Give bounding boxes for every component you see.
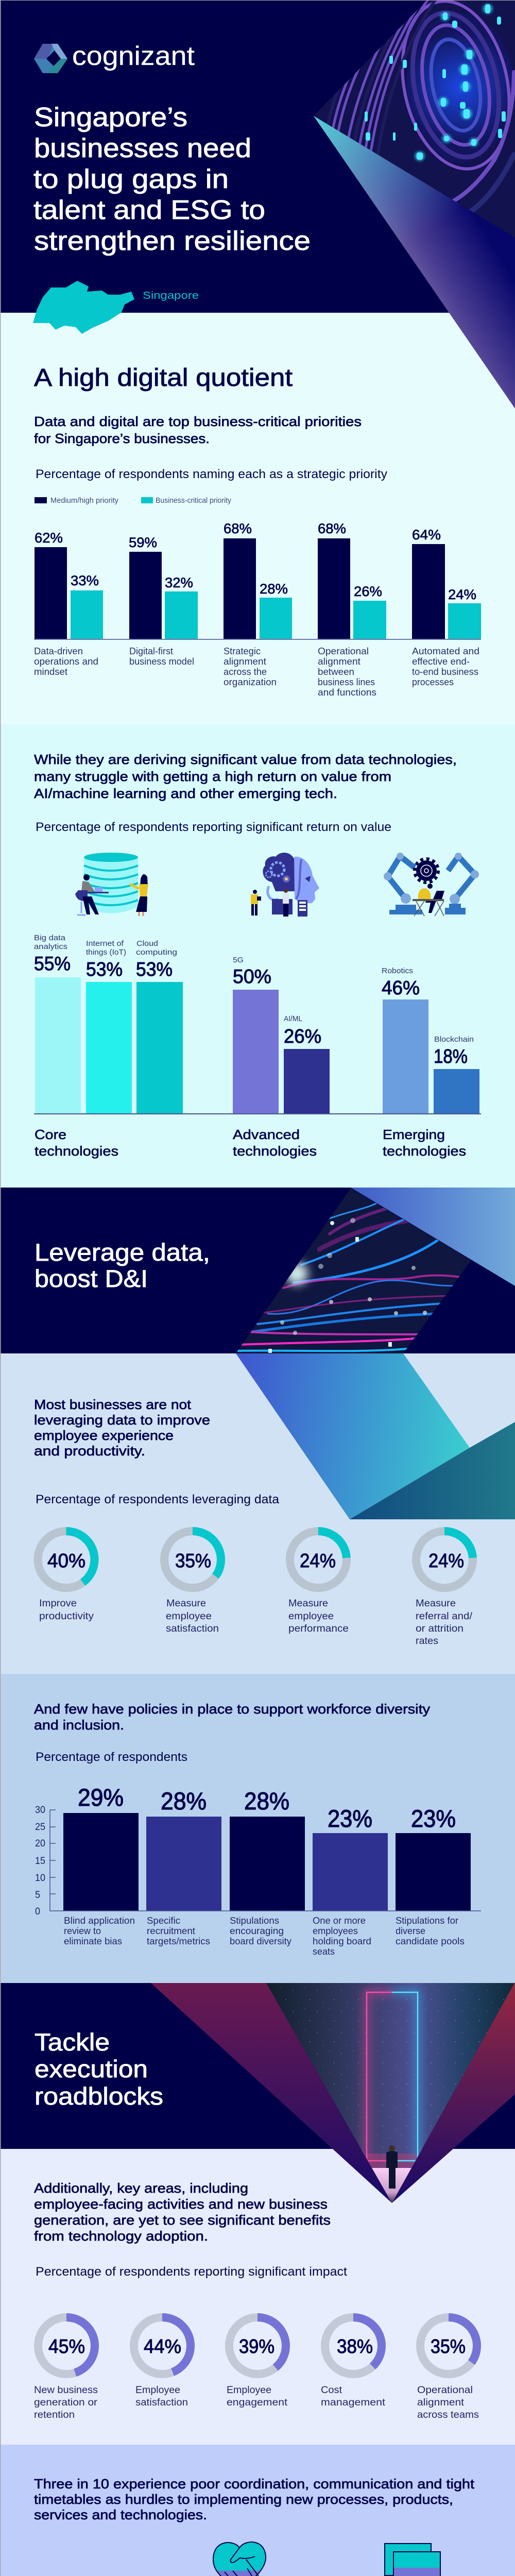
statement: not leveraging data: employee experience (34, 1428, 174, 1443)
statement: not leveraging data: and productivity. (34, 1443, 145, 1459)
bar chart: technology return on value: Emerging (383, 1127, 445, 1142)
panel: leveraging data (0, 1353, 515, 1674)
heading: leverage data, boost D&I: Leverage data, (35, 1239, 210, 1266)
donut: referral and attrition 24%: referral and/ (416, 1611, 473, 1622)
bar chart: strategic priorities: mindset (34, 667, 67, 677)
bar chart: D&I policies: seats (313, 1946, 335, 1957)
donut: new business 45%: 45% (48, 2336, 85, 2358)
bar chart: strategic priorities: 64% (412, 527, 441, 543)
donut: employee engagement 39%: engagement (227, 2397, 288, 2408)
donut: cost management 38%: 38% (337, 2336, 373, 2358)
title: strengthen resilience (34, 226, 311, 256)
logo: cognizant (34, 41, 195, 73)
bar chart: D&I policies: review to (64, 1926, 101, 1936)
shard: blue gradient band (236, 1353, 470, 1519)
donut: referral and attrition 24%: or attrition (416, 1623, 464, 1634)
bar chart: technology return on value: Advanced (233, 1127, 300, 1142)
statement: three in 10: services and technologies. (34, 2507, 207, 2522)
bar chart: technology return on value: Robotics (382, 967, 413, 975)
bar chart: D&I policies: 29% (78, 1784, 124, 1811)
bar chart: strategic priorities: processes (412, 677, 454, 687)
bar chart: D&I policies: holding board (313, 1936, 371, 1946)
bar chart: technology return on value: things (IoT) (86, 948, 126, 957)
shard: blue triangle (351, 1188, 515, 1286)
statement: deriving significant value: many struggle with getting a high return on value from (34, 769, 391, 784)
statement: three in 10: timetables as hurdles to implementing new processes, products, (34, 2492, 453, 2507)
icon: speech bubbles (385, 2544, 440, 2576)
bar chart: technology return on value: technologies (35, 1143, 118, 1159)
legend (35, 497, 232, 505)
donut: operational alignment 35%: alignment (417, 2397, 465, 2408)
bar chart: technology return on value (34, 934, 481, 1159)
statement: yet to see benefits: generation, are yet to see significant benefits (34, 2212, 331, 2228)
legend: Medium/high priority (50, 497, 119, 505)
bar chart: technology return on value: 5G (233, 956, 244, 964)
chart caption: Percentage of respondents reporting significant impact (36, 2265, 347, 2279)
statement: data and digital priorities: for Singapore’s businesses. (34, 431, 210, 446)
donut: new business 45%: New business (34, 2385, 98, 2396)
banner image: neon doorway (263, 1983, 515, 2205)
chart caption: Percentage of respondents (36, 1750, 187, 1764)
donut: improve productivity 40% (38, 1531, 95, 1622)
bar chart: technology return on value: 53% (86, 959, 123, 980)
bar chart: strategic priorities: 59% (129, 535, 157, 550)
donut: employee performance 24%: employee (288, 1611, 334, 1622)
bar chart: D&I policies: 0 (35, 1906, 40, 1917)
bar chart: strategic priorities: and functions (318, 687, 376, 698)
donut: improve productivity 40%: 40% (47, 1550, 85, 1572)
donut: employee engagement 39% (227, 2317, 288, 2408)
donut: employee performance 24%: performance (288, 1623, 349, 1634)
donut: operational alignment 35%: 35% (431, 2336, 466, 2358)
donut: operational alignment 35%: Operational (417, 2385, 473, 2396)
statement: not leveraging data: Most businesses are not (34, 1397, 192, 1412)
statement: not leveraging data: leveraging data to improve (34, 1412, 210, 1428)
donut: operational alignment 35% (417, 2317, 479, 2420)
bar chart: D&I policies: diverse (396, 1926, 425, 1936)
bar chart: strategic priorities: Operational (318, 646, 369, 656)
bar chart: strategic priorities: 26% (354, 584, 382, 599)
bar chart: D&I policies: 23% (328, 1805, 372, 1832)
bar chart: strategic priorities: 68% (224, 521, 252, 536)
bar chart: technology return on value: 46% (382, 977, 420, 999)
bar chart: D&I policies: employees (313, 1926, 358, 1936)
bar chart: technology return on value: 50% (233, 966, 271, 988)
heading: tackle execution roadblocks (35, 2028, 163, 2110)
donut: employee satisfaction 44%: Employee (135, 2385, 180, 2396)
heading: tackle execution roadblocks: roadblocks (35, 2082, 163, 2110)
hero image: swirling light strands (309, 0, 515, 242)
bar chart: D&I policies: 15 (35, 1856, 45, 1867)
donut: employee satisfaction 44%: 44% (144, 2336, 181, 2358)
bar chart: strategic priorities: across the (224, 667, 267, 677)
statement: few have policies: and inclusion. (34, 1717, 124, 1733)
map: Singapore (33, 281, 134, 334)
bar chart: strategic priorities: 28% (260, 581, 288, 597)
logo: cognizant: cognizant (72, 41, 195, 71)
shard: left maroon (151, 1983, 392, 2203)
label: Singapore: Singapore (143, 290, 199, 301)
statement: deriving significant value (34, 752, 457, 801)
donut: new business 45% (34, 2317, 98, 2420)
donut: improve productivity 40%: productivity (39, 1611, 94, 1622)
donut: employee satisfaction 35%: 35% (175, 1550, 211, 1572)
bar chart: D&I policies: Specific (147, 1916, 180, 1926)
donut: new business 45%: retention (34, 2410, 75, 2420)
heading: leverage data, boost D&I (35, 1239, 210, 1292)
heading: tackle execution roadblocks: execution (35, 2055, 148, 2082)
statement: three in 10: Three in 10 experience poor coordination, communication and tight (34, 2476, 475, 2492)
bar chart: technology return on value: Big data (34, 934, 66, 942)
bar chart: technology return on value: Internet of (86, 939, 124, 948)
bar chart: strategic priorities: alignment (318, 656, 360, 667)
bar chart: strategic priorities: between (318, 667, 354, 677)
donut: cost management 38% (321, 2317, 386, 2408)
shard: right maroon (392, 1983, 515, 2203)
chart caption: Percentage of respondents leveraging data (36, 1493, 280, 1506)
donut: referral and attrition 24% (416, 1531, 473, 1647)
bar chart: D&I policies (35, 1784, 481, 1957)
statement: data and digital priorities: Data and digital are top business-critical priorities (34, 414, 362, 429)
illustration: robot arms (384, 853, 479, 916)
bar chart: D&I policies: 28% (161, 1787, 207, 1815)
bar chart: technology return on value: Blockchain (434, 1035, 474, 1044)
donut: employee satisfaction 35%: satisfaction (166, 1623, 219, 1634)
donut: referral and attrition 24%: rates (416, 1636, 438, 1647)
chart caption: Percentage of respondents reporting significant return on value (36, 820, 391, 834)
donut: employee engagement 39%: 39% (239, 2336, 274, 2358)
bar chart: D&I policies: encouraging (230, 1926, 284, 1936)
donut: employee performance 24% (288, 1531, 349, 1634)
panel: tackle execution roadblocks banner (0, 1983, 515, 2205)
statement: yet to see benefits: Additionally, key areas, including (34, 2180, 248, 2196)
bar chart: D&I policies: 23% (411, 1805, 456, 1832)
bar chart: D&I policies: targets/metrics (147, 1936, 210, 1946)
donut: employee satisfaction 35% (164, 1531, 221, 1634)
statement: data and digital priorities (34, 414, 362, 446)
donut: employee satisfaction 35%: employee (166, 1611, 212, 1622)
bar chart: D&I policies: recruitment (147, 1926, 195, 1936)
statement: three in 10 (34, 2476, 475, 2522)
panel: hero (0, 0, 515, 409)
bar chart: strategic priorities: operations and (34, 656, 98, 667)
bar chart: strategic priorities: business lines (318, 677, 375, 687)
donut: new business 45%: generation or (34, 2397, 98, 2408)
title: to plug gaps in (33, 164, 229, 194)
donut: referral and attrition 24%: 24% (428, 1550, 464, 1572)
bar chart: D&I policies: eliminate bias (64, 1936, 122, 1946)
illustration: database with people (75, 853, 148, 916)
bar chart: D&I policies: Blind application (64, 1916, 135, 1926)
bar chart: D&I policies: 10 (35, 1873, 45, 1884)
bar chart: D&I policies: One or more (313, 1916, 366, 1926)
bar chart: strategic priorities: 68% (318, 521, 346, 536)
bar chart: D&I policies: 25 (35, 1822, 45, 1833)
bar chart: strategic priorities (34, 521, 481, 698)
donut: employee satisfaction 44% (134, 2317, 191, 2408)
bar chart: D&I policies: candidate pools (396, 1936, 465, 1946)
bar chart: technology return on value: computing (136, 948, 177, 957)
icon: handshake heart (213, 2542, 266, 2576)
bar chart: strategic priorities: alignment (224, 656, 266, 667)
bar chart: technology return on value: 55% (34, 953, 71, 975)
title (33, 103, 311, 256)
bar chart: technology return on value: Core (35, 1127, 66, 1142)
donut: improve productivity 40%: Improve (39, 1598, 77, 1609)
bar chart: technology return on value: 53% (136, 959, 173, 980)
bar chart: strategic priorities: Data-driven (34, 646, 83, 656)
donut: operational alignment 35%: across teams (417, 2410, 479, 2420)
panel: leverage data, boost D&I banner (0, 1185, 515, 1353)
donut: cost management 38%: Cost (321, 2385, 342, 2396)
bar chart: D&I policies: 20 (35, 1838, 45, 1849)
bar chart: technology return on value: 18% (434, 1046, 468, 1067)
panel: return on value (0, 724, 515, 1188)
donut: employee engagement 39%: Employee (227, 2385, 271, 2396)
bar chart: D&I policies: Stipulations (230, 1916, 279, 1926)
bar chart: strategic priorities: to-end business (412, 667, 478, 677)
donut: employee satisfaction 44%: satisfaction (135, 2397, 188, 2408)
donut: cost management 38%: management (321, 2397, 386, 2408)
bar chart: technology return on value: 26% (284, 1026, 321, 1047)
bar chart: strategic priorities: effective end- (412, 656, 470, 667)
bar chart: D&I policies: 30 (35, 1805, 45, 1816)
illustration: AI head (251, 853, 319, 917)
statement: few have policies: And few have policies in place to support workforce diversity (34, 1701, 430, 1717)
title: talent and ESG to (33, 195, 265, 225)
heading: a high digital quotient: A high digital quotient (34, 364, 293, 392)
statement: yet to see benefits: from technology adoption. (34, 2228, 208, 2244)
panel: implementation hurdles (0, 2445, 515, 2576)
statement: yet to see benefits (34, 2180, 331, 2244)
bar chart: strategic priorities: business model (129, 656, 194, 667)
title: businesses need (34, 133, 251, 163)
bar chart: technology return on value: technologies (383, 1143, 466, 1159)
title: Singapore’s (34, 103, 187, 132)
legend: Business-critical priority (156, 497, 232, 505)
bar chart: technology return on value: analytics (34, 942, 67, 951)
shard: gradient triangle (314, 116, 515, 409)
donut: employee satisfaction 35%: Measure (166, 1598, 206, 1609)
bar chart: strategic priorities: Automated and (412, 646, 479, 656)
heading: leverage data, boost D&I: boost D&I (35, 1265, 148, 1292)
donut: employee performance 24%: Measure (288, 1598, 328, 1609)
bar chart: D&I policies: Stipulations for (396, 1916, 458, 1926)
bar chart: D&I policies: board diversity (230, 1936, 291, 1946)
bar chart: D&I policies: 28% (244, 1787, 289, 1815)
bar chart: strategic priorities: 62% (35, 530, 63, 546)
bar chart: strategic priorities: Digital-first (129, 646, 173, 656)
bar chart: strategic priorities: 24% (448, 587, 476, 602)
donut: referral and attrition 24%: Measure (416, 1598, 456, 1609)
bar chart: strategic priorities: Strategic (224, 646, 261, 656)
bar chart: strategic priorities: 32% (165, 575, 193, 590)
donut: employee performance 24%: 24% (300, 1550, 336, 1572)
chart caption: Percentage of respondents naming each as a strategic priority (36, 467, 387, 481)
bar chart: D&I policies: 5 (35, 1890, 40, 1901)
shard: teal triangle (350, 1422, 515, 1519)
panel: diversity and inclusion policies (0, 1674, 515, 1983)
statement: not leveraging data (34, 1397, 210, 1459)
statement: yet to see benefits: employee-facing activities and new business (34, 2196, 328, 2212)
panel: a high digital quotient (0, 313, 515, 724)
bar chart: strategic priorities: organization (224, 677, 277, 687)
bar chart: technology return on value: technologies (233, 1143, 317, 1159)
statement: deriving significant value: While they are deriving significant value from data technologies, (34, 752, 457, 767)
bar chart: strategic priorities: 33% (71, 573, 99, 588)
bar chart: technology return on value: Cloud (136, 939, 158, 948)
bar chart: technology return on value: AI/ML (284, 1014, 302, 1023)
statement: deriving significant value: AI/machine learning and other emerging tech. (34, 786, 337, 801)
banner image: light streams (232, 1185, 479, 1353)
statement: few have policies (34, 1701, 430, 1733)
heading: tackle execution roadblocks: Tackle (35, 2028, 110, 2056)
panel: significant impact (0, 2149, 515, 2445)
